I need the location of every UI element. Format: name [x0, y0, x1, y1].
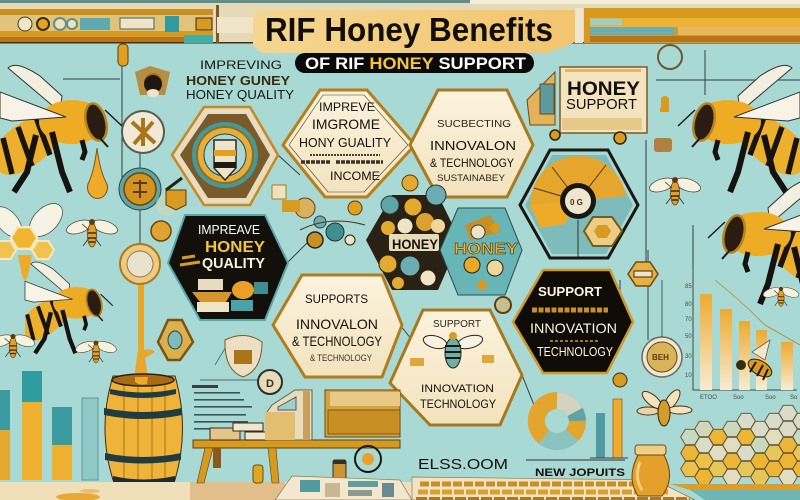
hexagon: support innovation technology — [390, 310, 522, 425]
illustration: workbench scene — [192, 279, 268, 312]
hexagon: improve income: HONY GUALITY — [299, 135, 391, 150]
donut chart — [536, 400, 578, 442]
workbench table — [193, 390, 400, 483]
hexagon: teal honey — [440, 208, 522, 295]
icon: bee on chart — [736, 340, 775, 381]
hexagon: supports innovation: SUPPORTS — [305, 292, 368, 306]
hexagon: support innovation technology: SUPPORT — [433, 319, 481, 330]
icon: flower bee — [637, 387, 692, 426]
hexagon: improve income — [283, 90, 415, 197]
hexagon: black support innovation: SUPPORT — [538, 284, 602, 299]
text block: improving honey quality: IMPREVING — [200, 58, 282, 72]
hexagon: black support innovation: INNOVATION — [530, 320, 617, 336]
text block: improving honey quality — [186, 58, 294, 102]
hexagon: supports innovation: INNOVALON — [296, 316, 378, 332]
axis labels: 80 — [685, 302, 692, 308]
hexagon: improve honey quality: HONEY — [205, 239, 265, 256]
papers on floor — [275, 476, 412, 500]
hexagon: improve income: INCOME — [330, 169, 380, 183]
axis labels — [685, 284, 798, 401]
floor left — [0, 482, 412, 500]
sign: honey support — [527, 67, 647, 144]
hexagon: center honey: HONEY — [392, 236, 439, 252]
axis labels: Soo — [765, 395, 776, 401]
hexagon: innovation sustainability: SUCBECTING — [437, 119, 511, 130]
jar on papers — [333, 460, 346, 482]
icons: small round badges: D — [266, 378, 274, 390]
keyboard tray — [412, 477, 695, 500]
title: RIF Honey Benefits — [265, 11, 553, 48]
sign: honey support: SUPPORT — [566, 96, 637, 113]
icon: round tokens left — [118, 44, 186, 241]
bar chart: left — [0, 371, 98, 480]
hexagon: innovation sustainability: & TECHNOLOGY — [430, 156, 514, 170]
icon: small bees — [0, 175, 800, 363]
axis labels: 85 — [685, 284, 692, 290]
label: new jopuits — [526, 460, 625, 479]
hexagon: supports innovation: & TECHNOLOGY — [292, 333, 383, 349]
hexagon: improve honey quality: IMPREAVE — [198, 222, 260, 237]
icon: honeycomb with wings left — [0, 197, 69, 280]
icon: lower right bee — [708, 177, 800, 304]
label: elss.oom: ELSS.OOM — [418, 456, 508, 473]
title plaque — [253, 10, 575, 53]
hexagon: pie chart — [520, 150, 638, 258]
icon: top bee right — [678, 65, 800, 192]
axis labels: 50 — [685, 334, 692, 340]
small bar chart — [590, 399, 628, 458]
hexagon: supports innovation — [273, 275, 402, 377]
connector lines and small specks — [63, 48, 800, 420]
subtitle text: OF RIF HONEY SUPPORT — [305, 54, 527, 73]
top shelf band — [0, 0, 800, 44]
books on table — [210, 423, 290, 440]
icon: top bee left — [0, 65, 122, 192]
axis labels: 30 — [685, 354, 692, 360]
axis labels: Soo — [733, 395, 744, 401]
cluster: small honey tools — [272, 185, 365, 248]
hexagon: center honey — [366, 175, 460, 290]
hexagon: innovation sustainability — [410, 90, 533, 197]
truck on table — [265, 390, 312, 440]
icons: small round badges: BEH — [652, 353, 669, 362]
label: new jopuits: NEW JOPUITS — [535, 467, 625, 479]
pie slices — [530, 156, 626, 228]
honeycomb bottom right — [681, 405, 800, 485]
icon: lower left bee — [25, 262, 113, 353]
machine on table — [325, 390, 400, 437]
hexagon: black support innovation — [513, 270, 633, 373]
hexagon: support innovation technology: INNOVATION — [421, 383, 494, 395]
hexagon: supports innovation: & TECHNOLOGY — [310, 353, 372, 363]
text block: small listing — [192, 385, 252, 430]
text block: improving honey quality: HONEY QUALITY — [186, 87, 294, 102]
subtitle pill — [295, 53, 534, 73]
hexagon: black support innovation: TECHNOLOGY — [537, 344, 613, 359]
sign: honey support: HONEY — [567, 79, 640, 100]
hexagon: pie chart: 0 G — [570, 198, 583, 207]
hexagon: support innovation technology: TECHNOLOGY — [420, 397, 496, 411]
axis labels: 10 — [685, 373, 692, 379]
icons: small round badges — [158, 45, 682, 394]
bar chart: right — [685, 270, 800, 401]
floor right — [670, 484, 800, 500]
icon: honey barrel — [104, 374, 182, 482]
hexagon: teal honey: HONEY — [454, 241, 518, 258]
text block: improving honey quality: HONEY GUNEY — [186, 73, 290, 88]
hexagon: improve income: IMGROME — [312, 116, 380, 132]
axis labels: So — [790, 395, 798, 401]
honey dipper token and drip — [120, 244, 160, 378]
icon: honey drop — [88, 148, 108, 198]
hexagon: bee emblem — [172, 107, 278, 205]
icon: honey jar — [632, 445, 670, 496]
axis labels: 70 — [685, 317, 692, 323]
hexagon: improve income: IMPREVE — [319, 100, 375, 114]
hexagon: improve honey quality — [168, 215, 288, 320]
hexagon: innovation sustainability: SUSTAINABEY — [437, 173, 505, 183]
icon: bee in hexagon — [410, 332, 494, 368]
hexagon: innovation sustainability: INNOVALON — [430, 138, 516, 153]
hexagon: improve honey quality: QUALITY — [202, 255, 265, 272]
axis labels: ETOO — [700, 395, 717, 401]
